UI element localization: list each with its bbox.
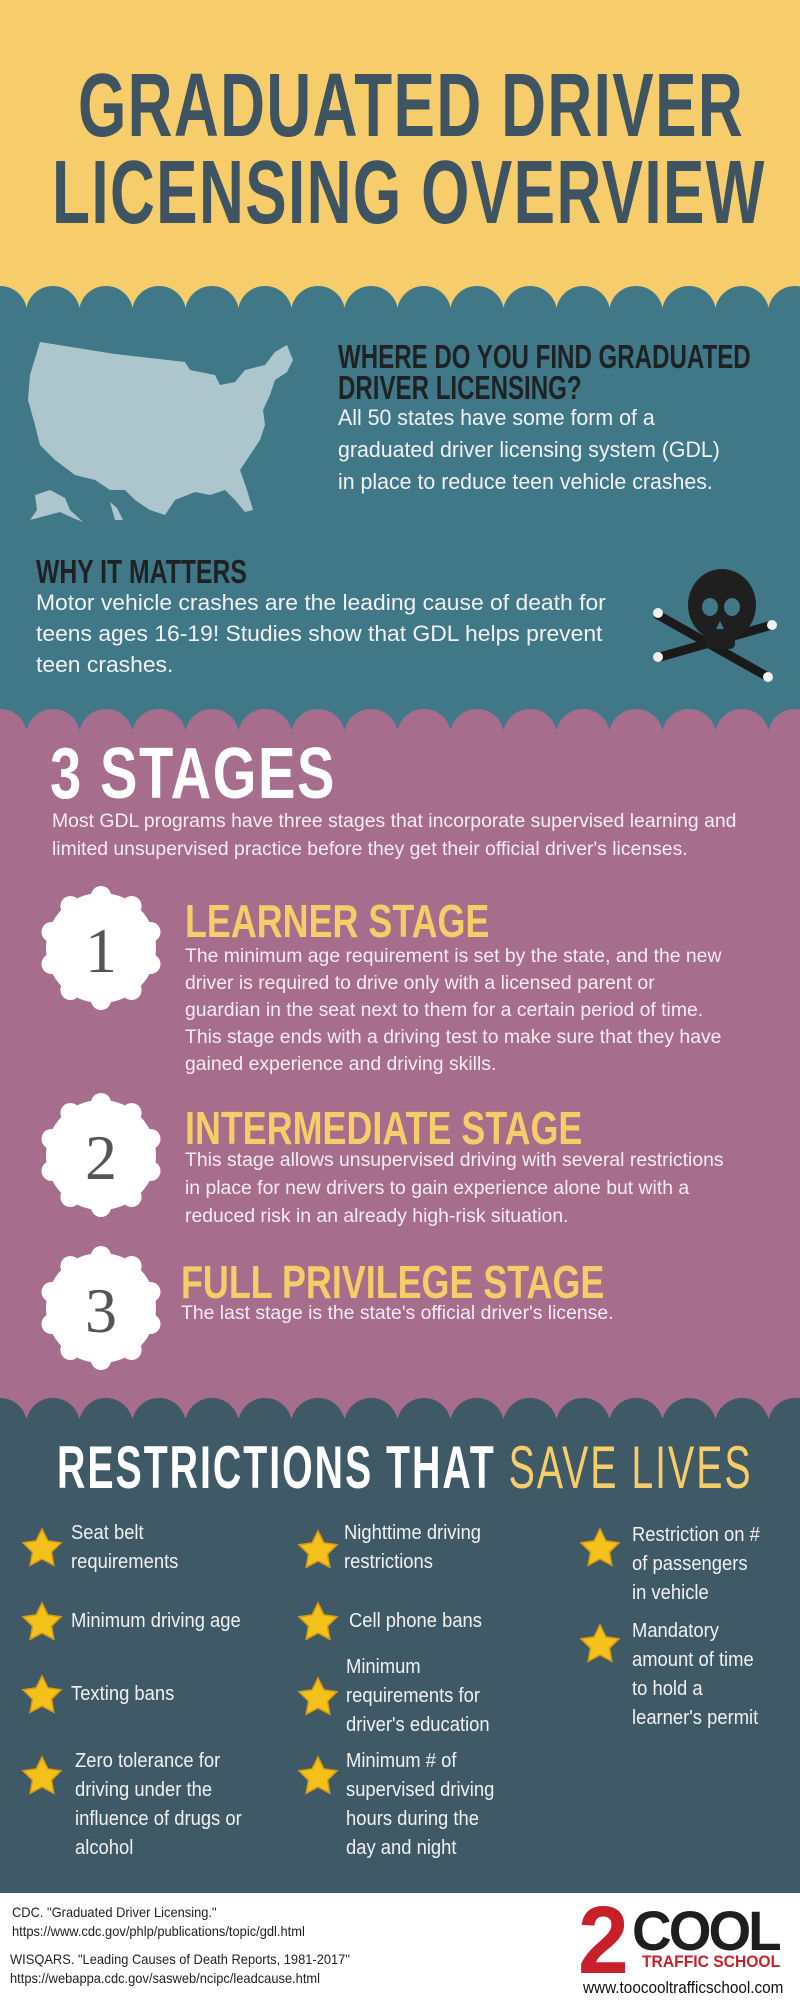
text block: intermediate xyxy=(185,1150,724,1227)
item: zero tolerance: influence of drugs or xyxy=(75,1808,242,1830)
item: driver's education: Minimum xyxy=(346,1656,421,1678)
text block: learner: gained experience and driving skills. xyxy=(185,1054,496,1075)
item: minimum driving age: Minimum driving age xyxy=(71,1610,241,1632)
item: passengers: Restriction on # xyxy=(632,1524,760,1546)
title: LICENSING OVERVIEW xyxy=(52,143,766,243)
background: teal section xyxy=(0,315,800,735)
scallop edges xyxy=(0,286,800,1418)
icon: badge 1 xyxy=(42,886,160,1010)
item: texting bans: Texting bans xyxy=(71,1683,174,1705)
title: GRADUATED DRIVER xyxy=(78,56,744,156)
item: learner's permit: to hold a xyxy=(632,1678,703,1700)
stage 2 xyxy=(42,1093,724,1227)
item: passengers xyxy=(632,1524,760,1604)
icon: skull and crossbones xyxy=(653,569,777,682)
text block: stages intro: limited unsupervised practice before they get their official driver's licenses. xyxy=(52,839,688,860)
footer sources: https://www.cdc.gov/phlp/publications/topic/gdl.html xyxy=(12,1923,305,1939)
text block: intermediate: reduced risk in an already high-risk situation. xyxy=(185,1206,568,1227)
footer sources: https://webappa.cdc.gov/sasweb/ncipc/leadcause.html xyxy=(10,1970,320,1986)
text block: learner: driver is required to drive only with a licensed parent or xyxy=(185,973,655,994)
text block: stages intro xyxy=(52,811,736,860)
text block: why it matters: teen crashes. xyxy=(36,652,173,677)
item: zero tolerance xyxy=(75,1750,242,1859)
icon: badge 3 xyxy=(42,1246,160,1370)
item: nighttime xyxy=(344,1522,481,1573)
icon: badge 2: 2 xyxy=(85,1122,117,1193)
heading: intermediate stage: INTERMEDIATE STAGE xyxy=(185,1102,582,1154)
item: seat belt xyxy=(71,1522,178,1573)
heading: full privilege stage: FULL PRIVILEGE STAGE xyxy=(181,1256,604,1308)
text block: stages intro: Most GDL programs have three stages that incorporate supervised learning and xyxy=(52,811,736,832)
footer sources: CDC. "Graduated Driver Licensing." xyxy=(12,1904,217,1920)
icon: US map xyxy=(28,342,293,522)
icon: badge 3: 3 xyxy=(85,1275,117,1346)
background: yellow header xyxy=(0,0,800,320)
item: supervised hours: supervised driving xyxy=(346,1779,494,1801)
stage 3 xyxy=(42,1246,614,1370)
text block: all 50 states: All 50 states have some form of a xyxy=(338,405,655,430)
text block: intermediate: This stage allows unsupervised driving with several restrictions xyxy=(185,1150,724,1171)
item: learner's permit: amount of time xyxy=(632,1649,754,1671)
item: learner's permit xyxy=(632,1620,758,1729)
logo: 2cool traffic school: www.toocooltrafficschool.com xyxy=(583,1978,783,1997)
text block: why it matters: teens ages 16-19! Studies show that GDL helps prevent xyxy=(36,621,602,646)
item: supervised hours: hours during the xyxy=(346,1808,479,1830)
heading: where do you find GDL: DRIVER LICENSING? xyxy=(338,369,582,406)
item: nighttime: Nighttime driving xyxy=(344,1522,481,1544)
item: supervised hours: Minimum # of xyxy=(346,1750,456,1772)
logo: 2cool traffic school: COOL xyxy=(632,1899,779,1962)
item: driver's education xyxy=(346,1656,490,1736)
item: driver's education: driver's education xyxy=(346,1714,490,1736)
logo: 2cool traffic school: TRAFFIC SCHOOL xyxy=(642,1952,780,1971)
item: learner's permit: Mandatory xyxy=(632,1620,719,1642)
text block: intermediate: in place for new drivers to gain experience alone but with a xyxy=(185,1178,689,1199)
logo: 2cool traffic school xyxy=(578,1887,783,1997)
item: driver's education: requirements for xyxy=(346,1685,480,1707)
footer sources xyxy=(10,1904,350,1986)
text block: full privilege: The last stage is the state's official driver's license. xyxy=(181,1303,614,1324)
text block: learner: This stage ends with a driving test to make sure that they have xyxy=(185,1027,721,1048)
logo: 2cool traffic school: 2 xyxy=(578,1887,629,1994)
restriction items xyxy=(22,1522,760,1859)
heading: restrictions that save lives: RESTRICTIONS THAT SAVE LIVES xyxy=(57,1434,753,1501)
item: seat belt: Seat belt xyxy=(71,1522,144,1544)
item: seat belt: requirements xyxy=(71,1551,178,1573)
title xyxy=(52,56,766,243)
icon: badge 2 xyxy=(42,1093,160,1217)
item: passengers: in vehicle xyxy=(632,1582,709,1604)
text block: learner xyxy=(185,946,722,1075)
text block: all 50 states xyxy=(338,405,720,494)
item: nighttime: restrictions xyxy=(344,1551,433,1573)
stage 1 xyxy=(42,886,722,1075)
heading: where do you find GDL: WHERE DO YOU FIND GRADUATED xyxy=(338,338,751,375)
text block: learner: The minimum age requirement is set by the state, and the new xyxy=(185,946,721,967)
text block: why it matters: Motor vehicle crashes are the leading cause of death for xyxy=(36,590,606,615)
heading: where do you find GDL xyxy=(338,338,751,406)
icon: badge 1: 1 xyxy=(85,915,117,986)
item: supervised hours xyxy=(346,1750,494,1859)
item: passengers: of passengers xyxy=(632,1553,748,1575)
text block: why it matters xyxy=(36,590,606,677)
item: zero tolerance: Zero tolerance for xyxy=(75,1750,220,1772)
item: learner's permit: learner's permit xyxy=(632,1707,758,1729)
item: cell phone: Cell phone bans xyxy=(349,1610,482,1632)
text block: all 50 states: graduated driver licensing system (GDL) xyxy=(338,437,720,462)
background: purple section xyxy=(0,730,800,1420)
heading: 3 stages: 3 STAGES xyxy=(50,734,336,814)
item: supervised hours: day and night xyxy=(346,1837,457,1859)
text block: learner: guardian in the seat next to them for a certain period of time. xyxy=(185,1000,703,1021)
heading: learner stage: LEARNER STAGE xyxy=(185,895,489,947)
footer sources: WISQARS. "Leading Causes of Death Reports, 1981-2017" xyxy=(10,1951,350,1967)
item: zero tolerance: alcohol xyxy=(75,1837,133,1859)
background: dark restrictions section xyxy=(0,1418,800,1893)
text block: all 50 states: in place to reduce teen vehicle crashes. xyxy=(338,469,713,494)
heading: why it matters: WHY IT MATTERS xyxy=(36,553,247,590)
item: zero tolerance: driving under the xyxy=(75,1779,212,1801)
